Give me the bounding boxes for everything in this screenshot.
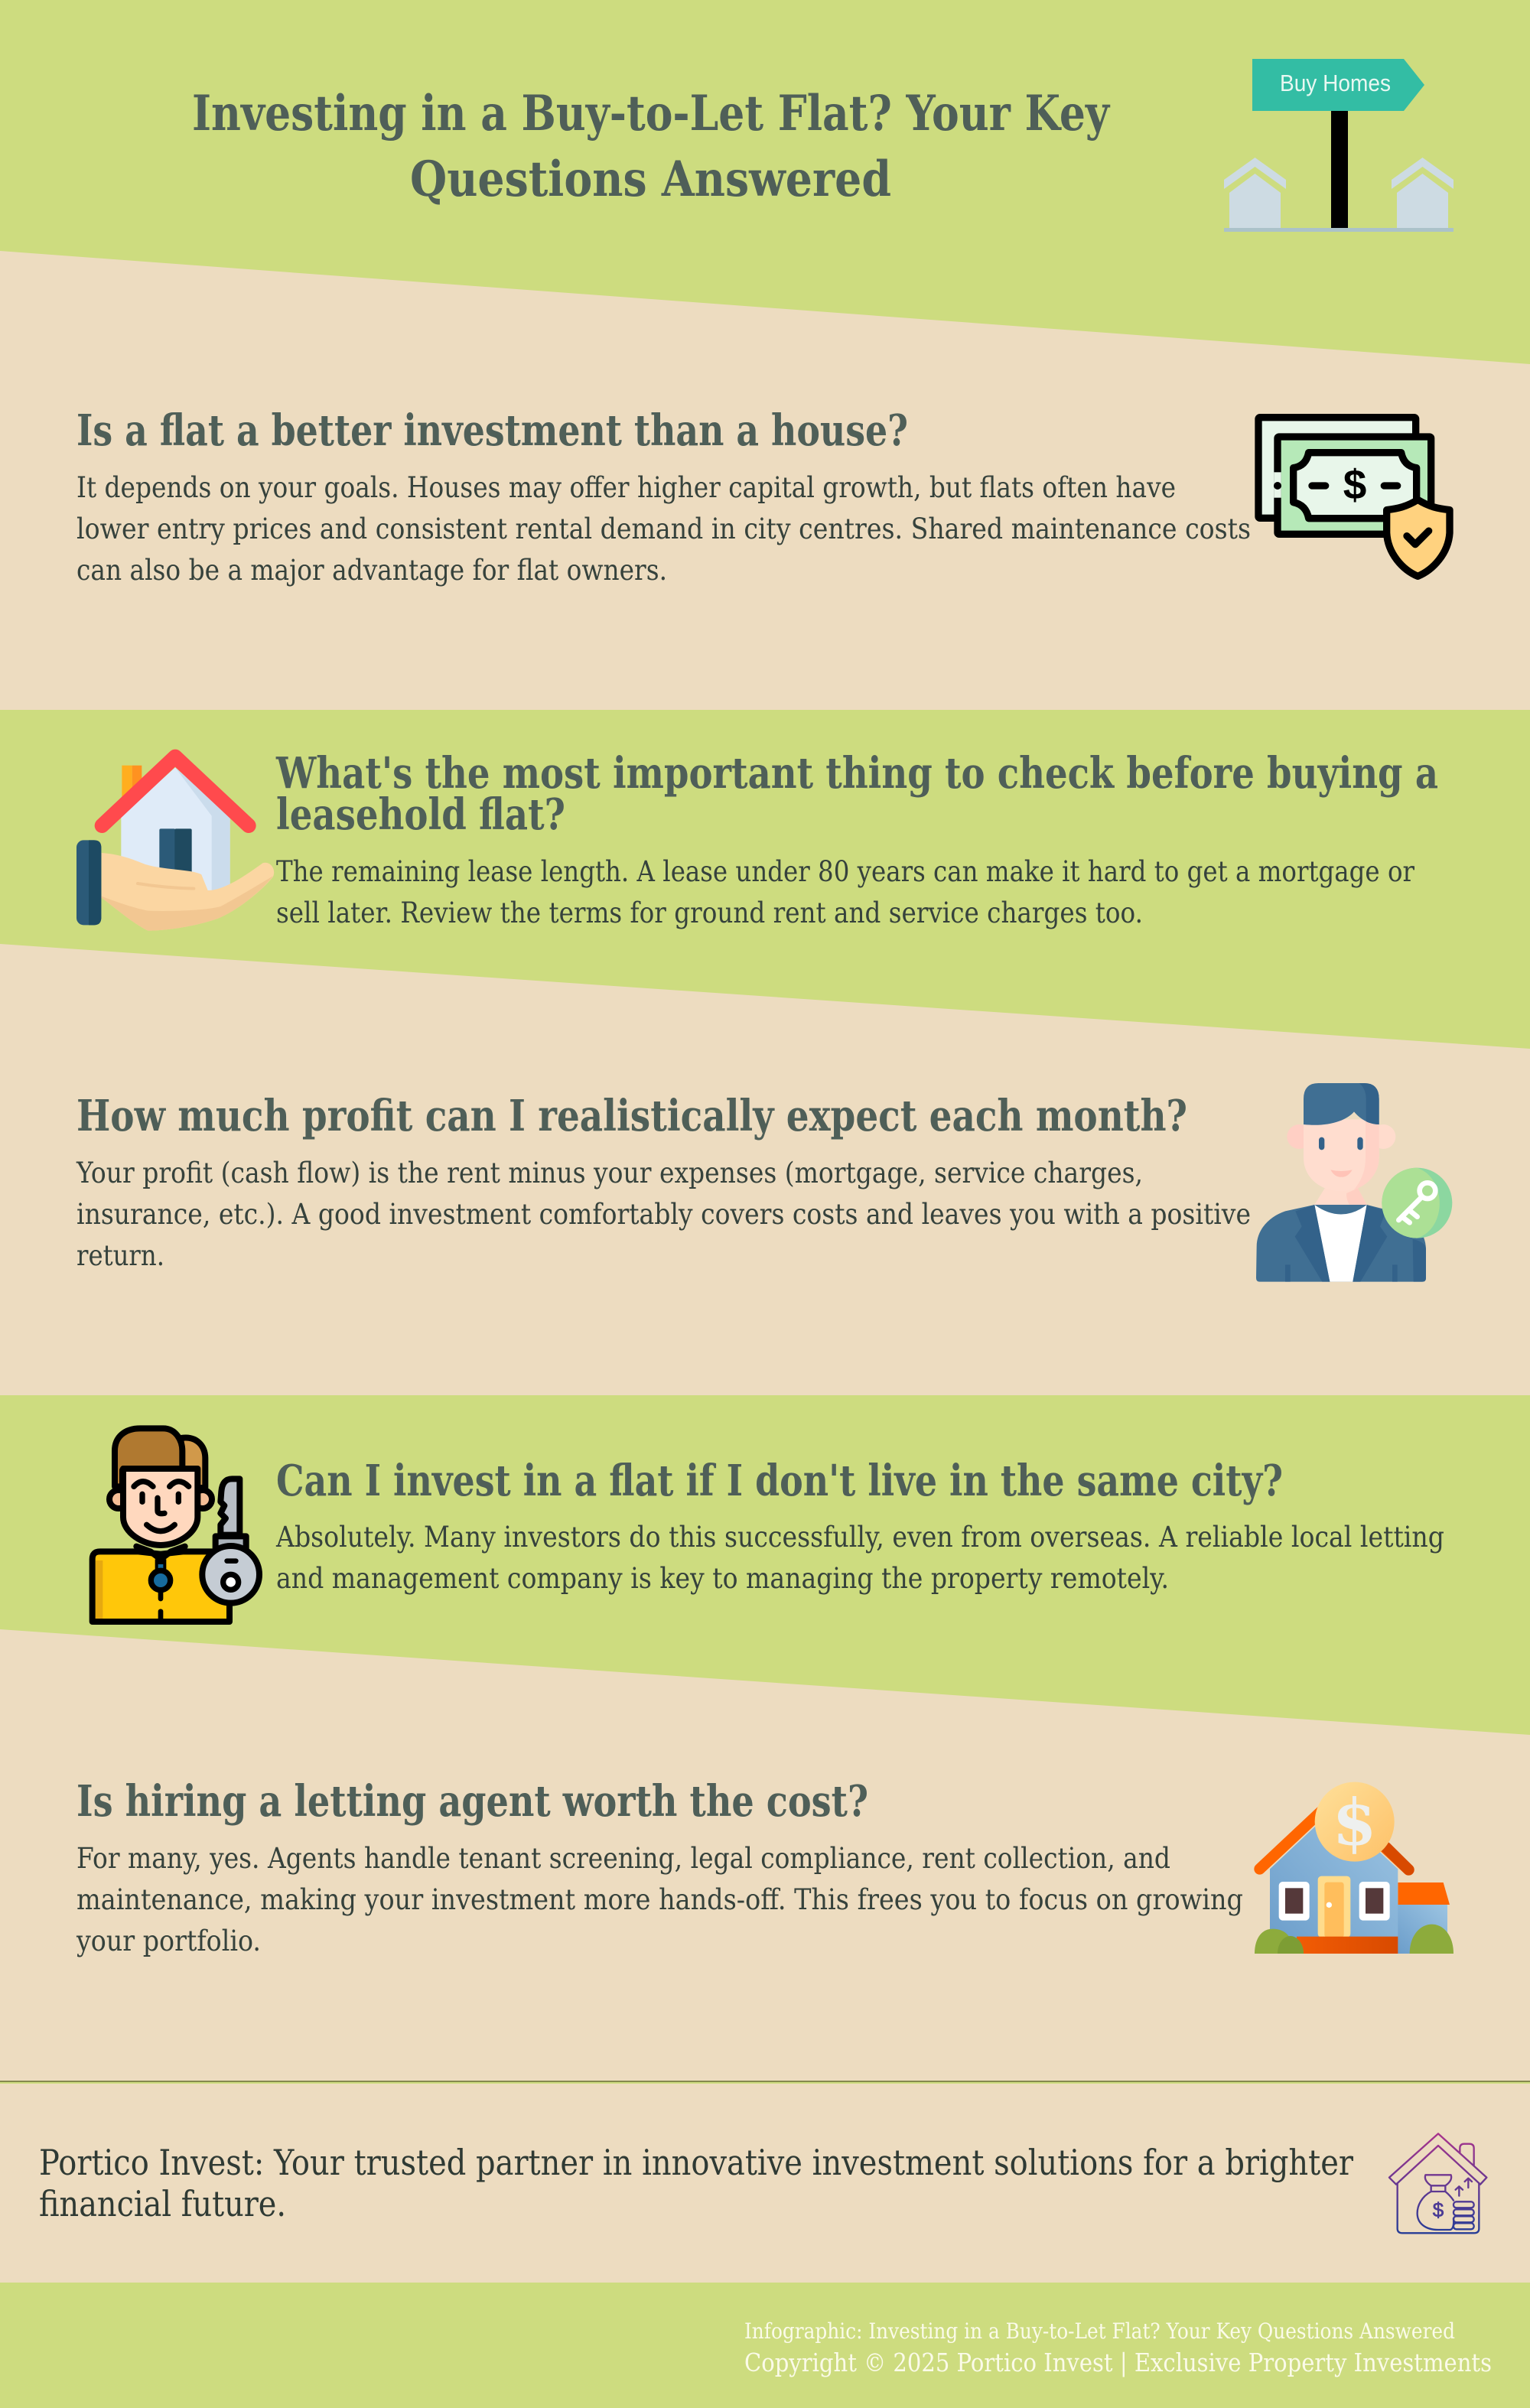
panel: question 4 text — [275, 1456, 1444, 1595]
text: footer credits — [744, 2319, 1492, 2377]
text: answer 2 — [276, 855, 1414, 929]
text: answer 5: your portfolio. — [76, 1925, 261, 1957]
text: answer 5 — [76, 1842, 1243, 1957]
panel: question 5 text — [76, 1776, 1243, 1957]
title: Investing in a Buy-to-Let Flat? Your Key — [192, 85, 1111, 142]
title — [192, 85, 1111, 208]
heading: question 3: How much profit can I realistically expect each month? — [76, 1091, 1187, 1141]
divider line — [0, 2081, 1530, 2084]
text: company tagline: financial future. — [39, 2183, 286, 2224]
text: answer 1: It depends on your goals. Houses may offer higher capital growth, but flats often have — [76, 471, 1176, 504]
heading: question 5: Is hiring a letting agent worth the cost? — [76, 1776, 868, 1827]
text: answer 3 — [76, 1157, 1251, 1272]
panel: question 4 band — [0, 1395, 1530, 1735]
text: answer 4: and management company is key to managing the property remotely. — [276, 1562, 1169, 1595]
icon: banknotes with shield — [1258, 418, 1450, 576]
icon: buy homes signpost — [1224, 59, 1454, 232]
text: company tagline: Portico Invest: Your trusted partner in innovative investment solutions for a brighter — [39, 2142, 1353, 2183]
icon: house with dollar coin: $ — [1333, 1785, 1377, 1860]
title: Questions Answered — [410, 151, 891, 208]
icon: hand holding house — [76, 757, 274, 931]
text: answer 1: lower entry prices and consistent rental demand in city centres. Shared maintenance costs — [76, 513, 1251, 545]
text: answer 3: Your profit (cash flow) is the rent minus your expenses (mortgage, service charges, — [76, 1157, 1143, 1189]
text: answer 1 — [76, 471, 1251, 587]
text: answer 4 — [275, 1521, 1444, 1595]
text: answer 3: insurance, etc.). A good investment comfortably covers costs and leaves you with a positive — [76, 1198, 1251, 1231]
icon: house with money bag — [1389, 2133, 1486, 2233]
panel: header band — [0, 0, 1530, 364]
icon: agent holding key — [93, 1428, 259, 1622]
panel: question 1 text — [76, 405, 1251, 587]
icon: house with dollar coin — [1255, 1782, 1454, 1954]
icon: banknotes with shield: $ — [1343, 461, 1366, 509]
panel: question 2 text — [275, 748, 1438, 929]
heading: question 4: Can I invest in a flat if I don't live in the same city? — [276, 1456, 1283, 1506]
text: company tagline — [39, 2142, 1353, 2224]
icon: house with money bag: $ — [1433, 2198, 1444, 2221]
text: answer 2: sell later. Review the terms for ground rent and service charges too. — [276, 896, 1143, 929]
heading: question 2: leasehold flat? — [276, 789, 565, 840]
text: answer 5: maintenance, making your investment more hands-off. This frees you to focus on growing — [76, 1883, 1243, 1916]
icon: man in suit with key badge — [1256, 1083, 1452, 1282]
text: answer 1: can also be a major advantage for flat owners. — [76, 554, 667, 587]
panel: footer band — [0, 2283, 1530, 2408]
heading: question 1: Is a flat a better investment than a house? — [76, 405, 908, 456]
panel: question 3 text — [76, 1091, 1251, 1272]
text: answer 3: return. — [76, 1239, 164, 1272]
text: answer 5: For many, yes. Agents handle tenant screening, legal compliance, rent collection, and — [76, 1842, 1170, 1875]
icon: buy homes signpost: Buy Homes — [1280, 70, 1391, 96]
text: footer credits: Infographic: Investing in a Buy-to-Let Flat? Your Key Questions Answered — [744, 2319, 1455, 2344]
heading: question 2 — [275, 748, 1438, 840]
panel: question 2 band — [0, 710, 1530, 1049]
